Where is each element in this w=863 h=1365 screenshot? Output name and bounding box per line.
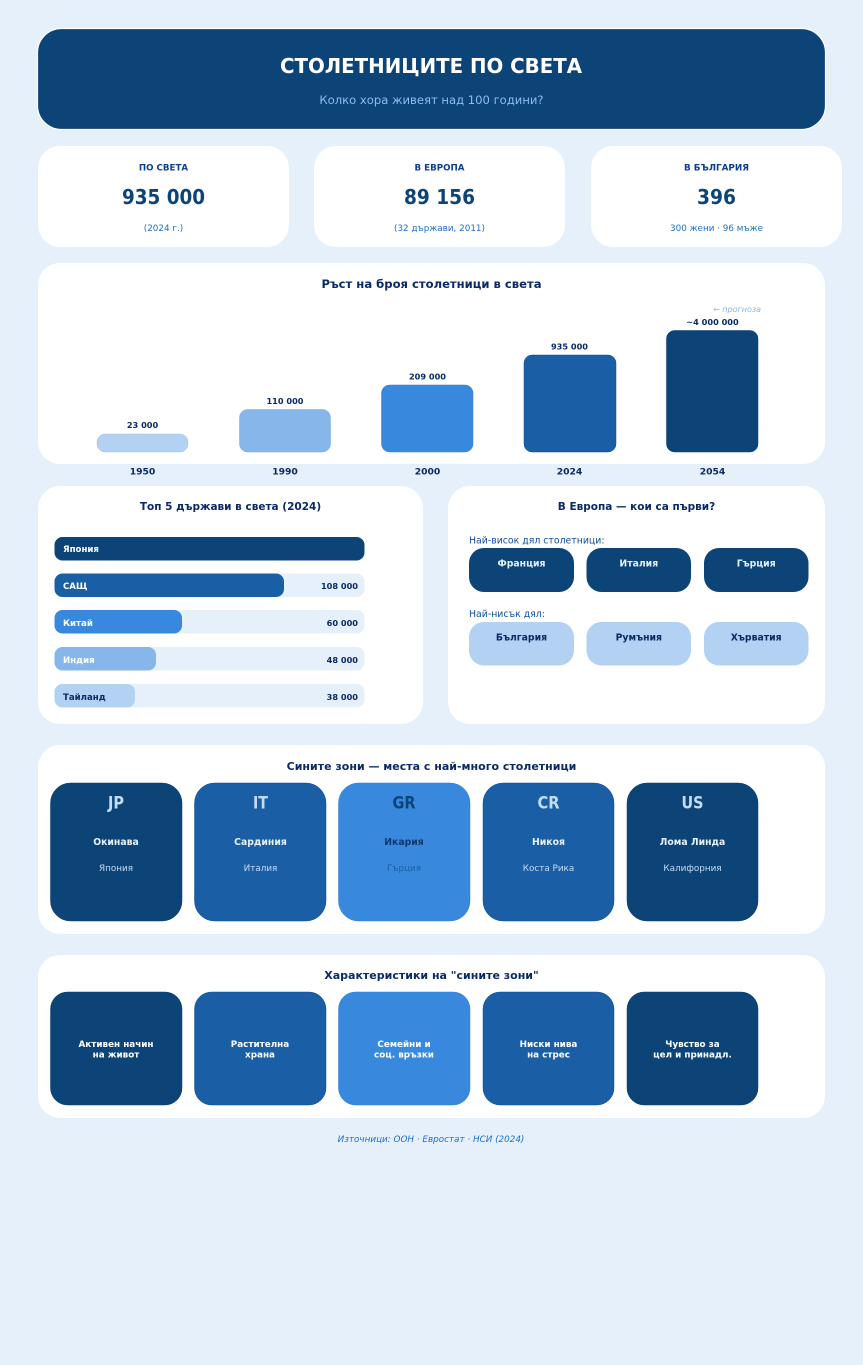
row: USA: 108 000 <box>321 581 358 591</box>
trait: low stress: на стрес <box>527 1050 570 1060</box>
row: China: Китай <box>63 619 93 629</box>
stat card: Europe <box>314 146 565 247</box>
highest share countries <box>469 548 808 592</box>
zone: Sardinia: Сардиния <box>234 837 287 848</box>
zone: Sardinia <box>194 783 326 921</box>
panel: growth chart <box>38 263 825 478</box>
row: USA <box>54 574 364 597</box>
stat card: world <box>38 146 289 247</box>
zone: Okinawa: Окинава <box>93 837 139 848</box>
stat card: Bulgaria: 396 <box>697 185 736 209</box>
row: China: 60 000 <box>327 618 358 628</box>
row: India <box>54 647 364 670</box>
stat card: world: (2024 г.) <box>144 224 183 234</box>
trait: plant food: храна <box>245 1050 275 1060</box>
trait: family and social ties: соц. връзки <box>374 1050 434 1060</box>
row: USA: САЩ <box>63 582 87 592</box>
bar chart <box>97 317 758 478</box>
stat card: Europe: В ЕВРОПА <box>415 164 465 174</box>
stat card: Bulgaria: 300 жени · 96 мъже <box>670 224 763 234</box>
panel: top 5 countries <box>38 486 423 724</box>
zone: Nicoya: CR <box>538 794 560 814</box>
trait: purpose and belonging: Чувство за <box>665 1040 720 1050</box>
zone: Okinawa: Япония <box>99 864 133 874</box>
panel: Europe ranking <box>448 486 825 724</box>
bar chart: 23 000 <box>127 420 158 430</box>
panel: blue zone traits <box>38 955 825 1118</box>
Europe heading: В Европа — кои са първи? <box>558 501 715 513</box>
row: India: Индия <box>63 656 95 666</box>
bar chart: 2054 <box>700 466 725 478</box>
row: China <box>54 610 364 634</box>
stat card: Europe: 89 156 <box>404 185 475 209</box>
zone: Ikaria: GR <box>392 794 416 814</box>
panel: blue zones <box>38 745 825 934</box>
bar chart: ~4 000 000 <box>686 317 739 327</box>
zone: Nicoya: Коста Рика <box>523 864 574 874</box>
zone: Nicoya: Никоя <box>532 837 565 848</box>
highest share countries: Франция <box>498 558 546 570</box>
highest share countries: Гърция <box>737 558 776 570</box>
bar chart: 2024 <box>557 466 582 478</box>
zone: Ikaria: Икария <box>384 837 424 848</box>
trait: purpose and belonging <box>627 992 758 1105</box>
growth chart heading: Ръст на броя столетници в света <box>321 277 542 291</box>
stat card: Bulgaria: В БЪЛГАРИЯ <box>684 164 749 174</box>
bar chart: 1990 <box>272 466 298 478</box>
zone: Loma Linda <box>627 783 758 921</box>
zone: Loma Linda: US <box>682 794 704 814</box>
trait: active life <box>50 992 182 1105</box>
zone: Nicoya <box>483 783 614 921</box>
forecast note: ← прогноза <box>713 305 761 314</box>
stat card: Bulgaria <box>591 146 842 247</box>
lowest share countries <box>469 622 808 666</box>
row: Japan: Япония <box>63 545 99 555</box>
trait: family and social ties <box>338 992 470 1105</box>
stat card: world: ПО СВЕТА <box>139 164 188 174</box>
footer sources: Източници: ООН · Евростат · НСИ (2024) <box>338 1135 524 1145</box>
row: Thailand: Тайланд <box>63 693 106 703</box>
bar chart: 110 000 <box>266 396 304 406</box>
row: Thailand: 38 000 <box>327 692 358 702</box>
row: Thailand <box>54 684 364 708</box>
trait: active life: Активен начин <box>78 1040 154 1050</box>
zone: Sardinia: Италия <box>244 864 277 874</box>
row: Japan <box>54 537 364 560</box>
top 5 heading: Топ 5 държави в света (2024) <box>140 501 321 513</box>
row: India: 48 000 <box>327 655 358 665</box>
trait: low stress <box>483 992 614 1105</box>
zone: Okinawa: JP <box>107 794 124 814</box>
stat card: Europe: (32 държави, 2011) <box>394 224 485 234</box>
lowest share countries: България <box>496 632 547 644</box>
title: СТОЛЕТНИЦИТЕ ПО СВЕТА <box>280 54 583 78</box>
bar chart: 2000 <box>415 466 440 478</box>
highest share countries: Италия <box>619 558 658 570</box>
subtitle: Колко хора живеят над 100 години? <box>319 93 544 107</box>
zone: Loma Linda: Калифорния <box>663 864 722 874</box>
zone: Ikaria <box>338 783 470 921</box>
lowest share countries: Хърватия <box>731 632 782 644</box>
zone: Sardinia: IT <box>253 794 268 814</box>
trait: active life: на живот <box>93 1050 140 1060</box>
label: lowest share: Най-нисък дял: <box>469 609 545 620</box>
trait: plant food <box>194 992 326 1105</box>
bar chart: 209 000 <box>409 372 446 382</box>
lowest share countries: Румъния <box>616 632 662 644</box>
trait: family and social ties: Семейни и <box>377 1040 431 1050</box>
traits heading: Характеристики на "сините зони" <box>324 969 539 982</box>
zone: Ikaria: Гърция <box>387 864 421 874</box>
zone: Loma Linda: Лома Линда <box>660 837 725 848</box>
bar chart: 935 000 <box>551 342 588 352</box>
trait: purpose and belonging: цел и принадл. <box>653 1050 732 1060</box>
trait: low stress: Ниски нива <box>520 1040 577 1050</box>
label: highest share: Най-висок дял столетници: <box>469 536 604 546</box>
header banner <box>38 28 826 130</box>
blue zones heading: Сините зони — места с най-много столетници <box>287 760 576 773</box>
stat card: world: 935 000 <box>122 185 205 209</box>
zone: Okinawa <box>50 783 182 921</box>
trait: plant food: Растителна <box>231 1040 289 1050</box>
bar chart: 1950 <box>130 466 155 478</box>
